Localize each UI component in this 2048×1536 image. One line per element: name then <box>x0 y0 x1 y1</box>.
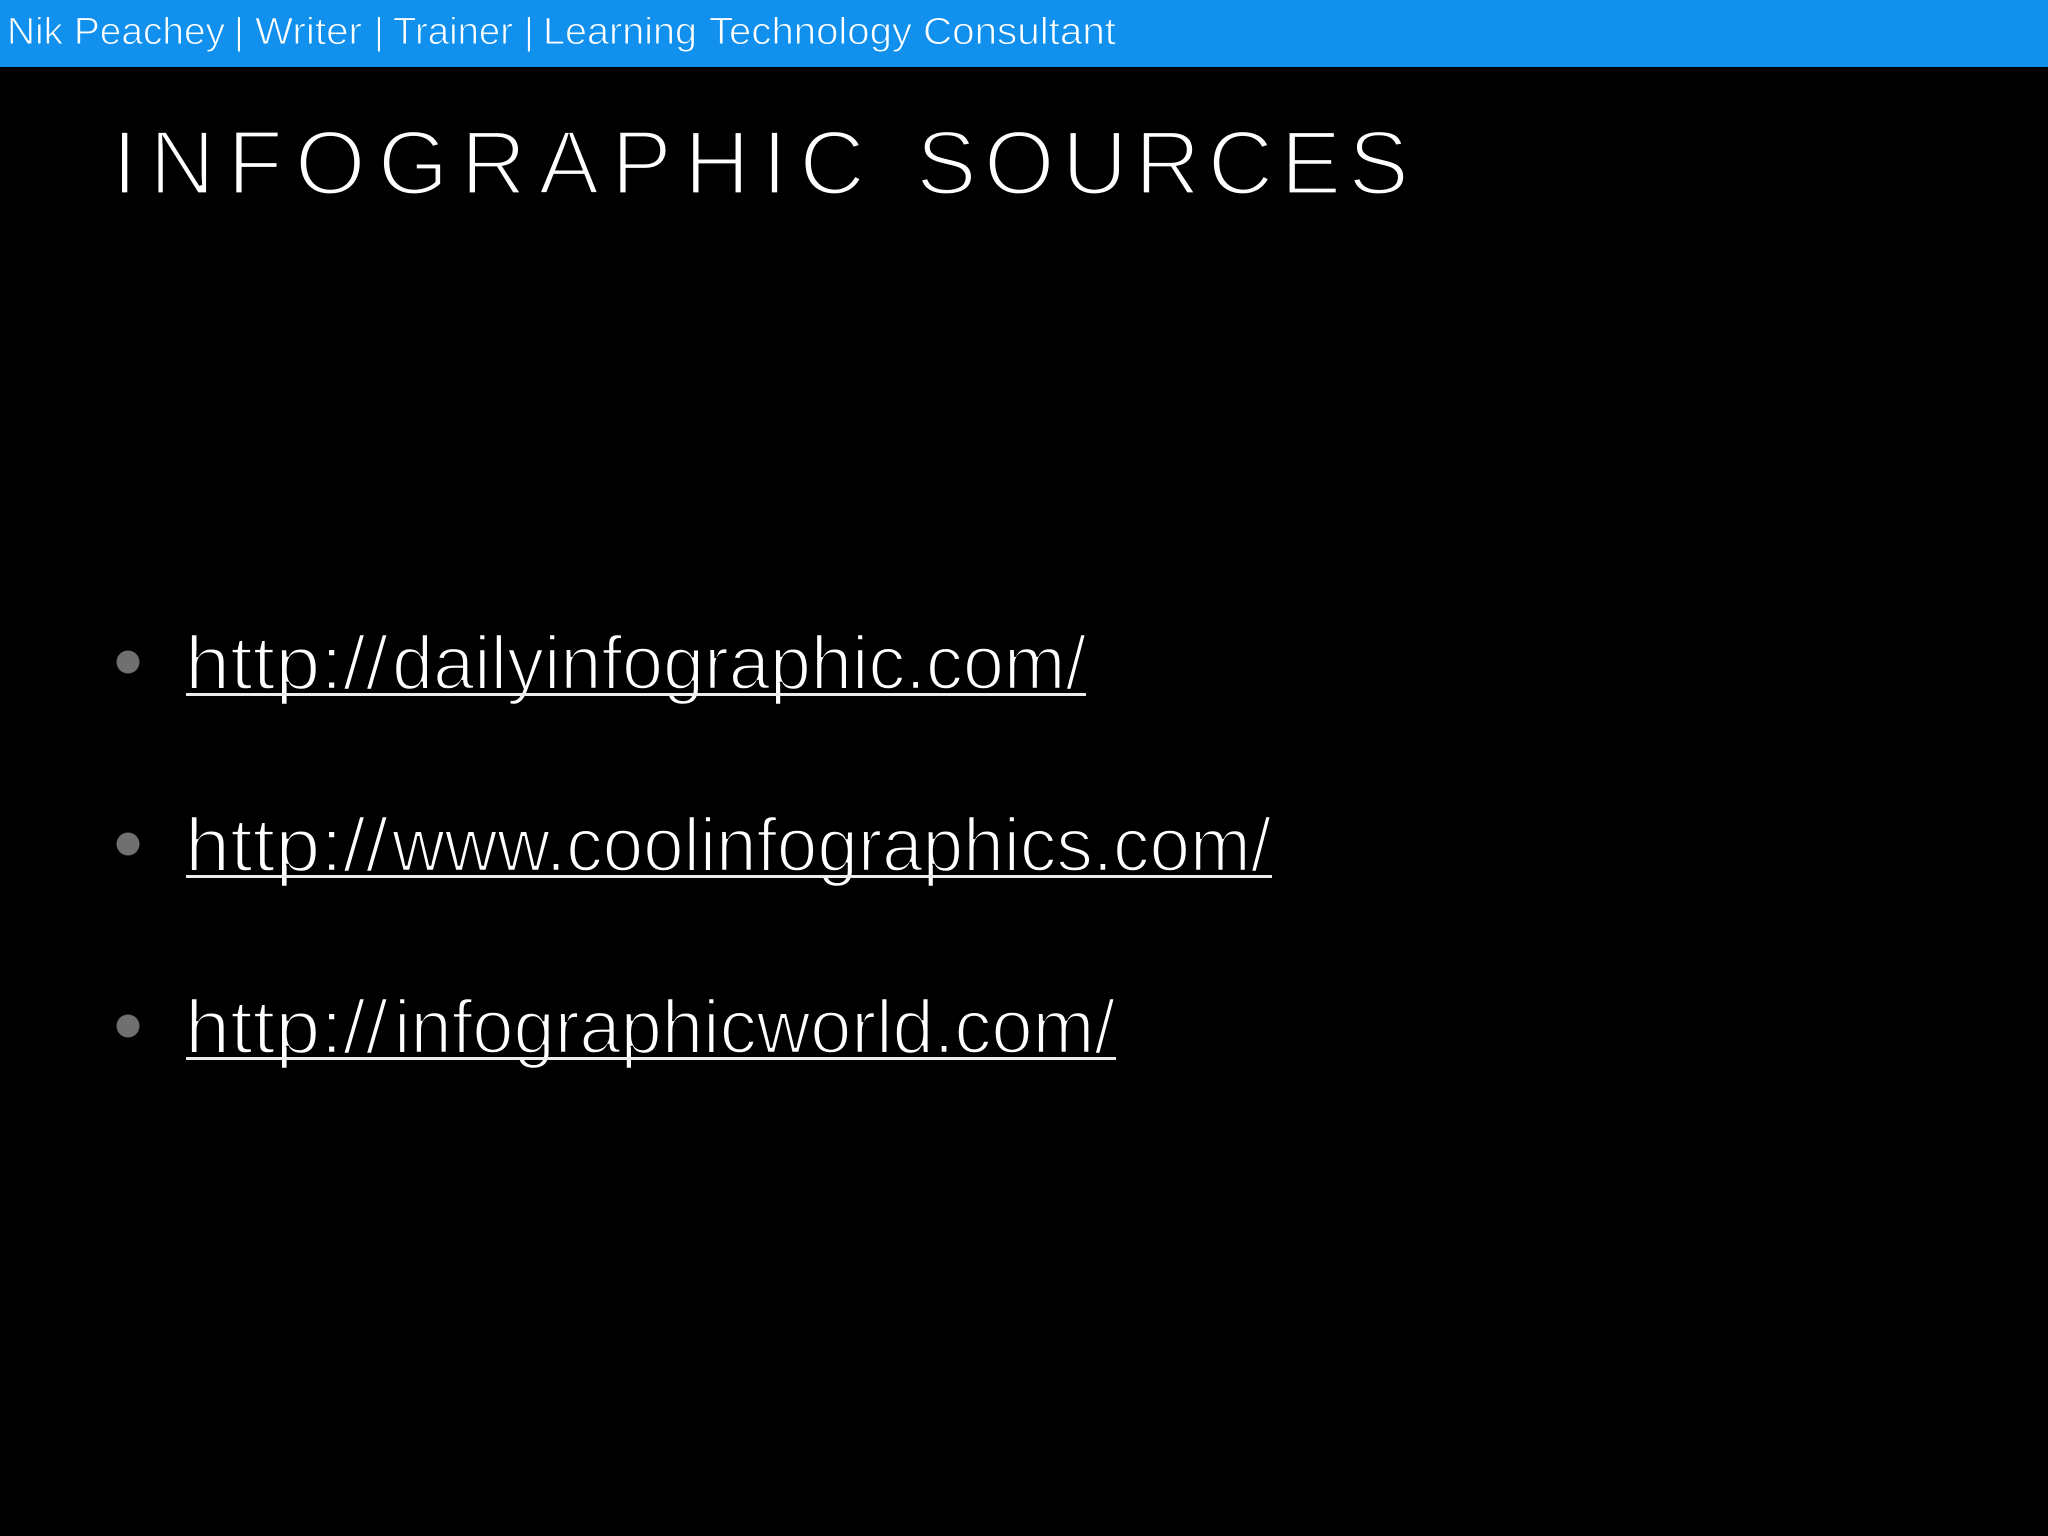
list item 3 <box>116 985 1116 1070</box>
header text: Trainer <box>393 11 513 53</box>
header text: Nik Peachey <box>7 11 225 53</box>
header text: Technology <box>709 11 912 53</box>
list item 1 <box>116 621 1087 706</box>
link 3: http:// <box>185 985 389 1070</box>
link 2: http:// <box>185 803 389 888</box>
header text: Writer <box>255 11 362 53</box>
title: SOURCES <box>916 113 1409 214</box>
bullet 3 <box>116 1014 140 1038</box>
link 1: dailyinfographic.com/ <box>392 621 1087 706</box>
header text <box>7 11 1116 53</box>
header bar <box>0 0 2048 67</box>
header text: | <box>234 11 244 53</box>
list item 2 <box>116 803 1272 888</box>
header text: | <box>374 11 384 53</box>
header text: Learning <box>543 11 697 53</box>
title: INFOGRAPHIC <box>112 113 865 214</box>
link 2: www.coolinfographics.com/ <box>391 803 1272 888</box>
header text: | <box>524 11 534 53</box>
link 1: http:// <box>185 621 389 706</box>
bullet 1 <box>116 650 140 674</box>
link 3: infographicworld.com/ <box>394 985 1116 1070</box>
bullet 2 <box>116 832 140 856</box>
title <box>112 113 1409 214</box>
list of source links <box>116 621 1272 1070</box>
header text: Consultant <box>923 11 1116 53</box>
